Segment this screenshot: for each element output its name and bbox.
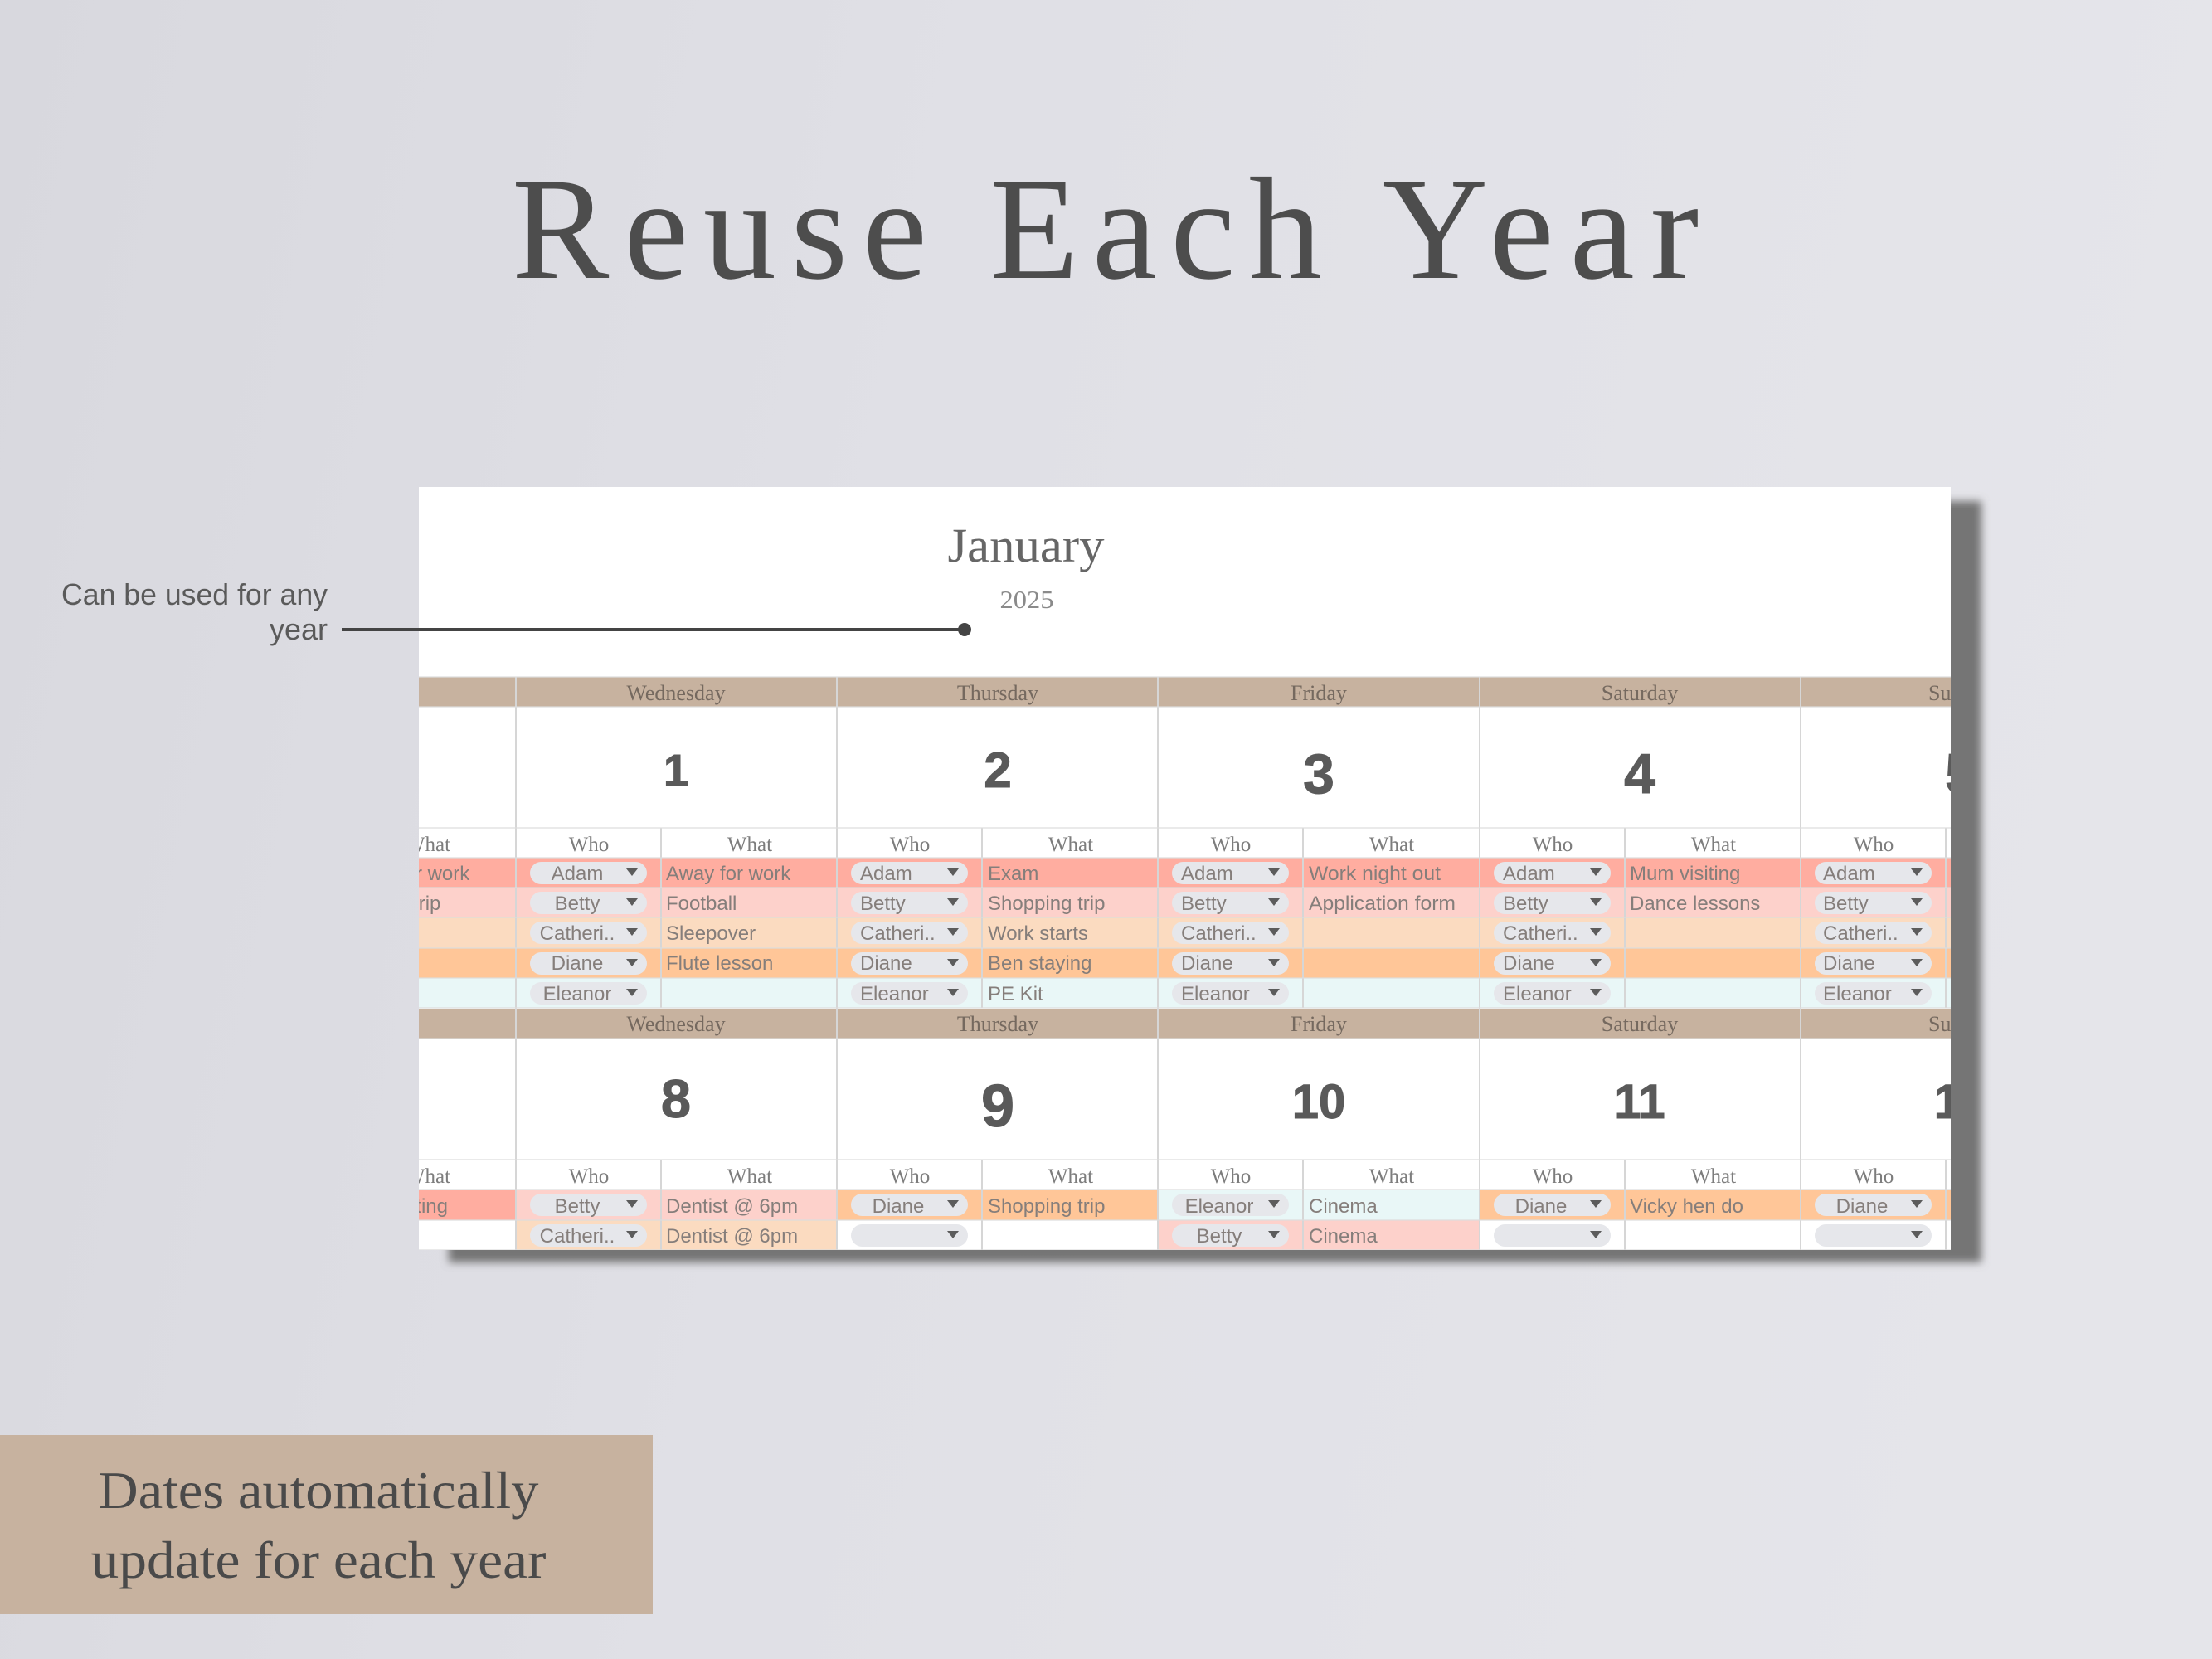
title: Each bbox=[989, 148, 1385, 310]
Saturday 4 entries: Eleanor bbox=[1503, 983, 1572, 1005]
Wednesday 1 entries: Diane bbox=[552, 952, 603, 975]
Saturday 4 entries: Adam bbox=[1503, 863, 1555, 885]
Sunday 5 entries: Betty bbox=[1823, 893, 1869, 915]
Saturday 11 entries: Diane bbox=[1515, 1195, 1567, 1218]
Saturday 4 entries: Catheri.. bbox=[1503, 922, 1578, 945]
week 2 date numbers: 10 bbox=[1292, 1075, 1345, 1129]
callout box: dates update bbox=[0, 1435, 653, 1614]
week 2 who and what labels: What bbox=[1691, 1165, 1736, 1188]
week 1 who and what labels: Who bbox=[1211, 834, 1251, 856]
Wednesday 1 entries: Flute lesson bbox=[666, 952, 773, 975]
month heading: January bbox=[947, 518, 1105, 572]
week 1 day header band: Saturday bbox=[1602, 681, 1678, 705]
week 1 who and what labels: What bbox=[406, 834, 450, 856]
Thursday 2 entries: Shopping trip bbox=[988, 893, 1105, 915]
week 2 day header band: Saturday bbox=[1602, 1012, 1678, 1036]
week 2 day header band: Sunday bbox=[1928, 1012, 1993, 1036]
month heading bbox=[949, 529, 1105, 609]
week 1 who and what labels: What bbox=[1048, 834, 1093, 856]
Wednesday 1 entries bbox=[530, 862, 791, 1005]
Sunday 5 entries: Eleanor bbox=[1823, 983, 1892, 1005]
Sunday 5 entries bbox=[1815, 862, 1932, 1005]
Saturday 4 entries: Mum visiting bbox=[1630, 863, 1740, 885]
panel: calendar spreadsheet bbox=[345, 487, 1993, 1250]
week 1 who and what labels: Who bbox=[1533, 834, 1573, 856]
Saturday 4 entries: Diane bbox=[1503, 952, 1555, 975]
Friday 3 entries: Adam bbox=[1181, 863, 1233, 885]
Thursday 2 entries bbox=[851, 862, 1105, 1005]
Friday 3 entries: Diane bbox=[1181, 952, 1233, 975]
callout box: dates update: Dates automatically bbox=[98, 1461, 539, 1520]
Friday 3 entries bbox=[1172, 862, 1456, 1005]
week 2 who and what labels: Who bbox=[1533, 1165, 1573, 1188]
Saturday 11 entries bbox=[1494, 1194, 1743, 1247]
left partial column entries bbox=[419, 866, 469, 1217]
Thursday 9 entries: Diane bbox=[873, 1195, 924, 1218]
week 1 coloured person rows bbox=[419, 858, 1951, 1008]
Friday 10 entries: Betty bbox=[1197, 1225, 1242, 1248]
week 1 date numbers: 5 bbox=[1945, 742, 1976, 805]
week 1 date numbers: 3 bbox=[1303, 742, 1334, 805]
week 1 day header band: Thursday bbox=[957, 681, 1038, 705]
week 1 who and what labels: What bbox=[1691, 834, 1736, 856]
Friday 10 entries bbox=[1172, 1194, 1378, 1248]
Saturday 4 entries: Betty bbox=[1503, 893, 1548, 915]
Thursday 2 entries: Adam bbox=[860, 863, 912, 885]
week 1 day header band bbox=[419, 677, 1993, 707]
panel shadow bbox=[449, 501, 1981, 1262]
Wednesday 1 entries: Football bbox=[666, 893, 737, 915]
callout: can be used for any year: year bbox=[270, 612, 328, 646]
week 1 who and what labels: Who bbox=[569, 834, 609, 856]
Saturday 4 entries: Dance lessons bbox=[1630, 893, 1760, 915]
week 2 date numbers: 9 bbox=[981, 1073, 1014, 1140]
week 1 who and what labels: Who bbox=[1854, 834, 1894, 856]
week 2 date numbers: 11 bbox=[1614, 1075, 1665, 1129]
Wednesday 1 entries: Eleanor bbox=[543, 983, 611, 1005]
Wednesday 1 entries: Away for work bbox=[666, 863, 791, 885]
week 2 who and what labels bbox=[419, 1168, 1893, 1183]
week 2 day header band: Wednesday bbox=[626, 1012, 726, 1036]
week 1 who and what labels: Who bbox=[890, 834, 930, 856]
week 1 who and what labels bbox=[419, 836, 1893, 851]
Thursday 9 entries bbox=[851, 1194, 1105, 1247]
Thursday 2 entries: Catheri.. bbox=[860, 922, 936, 945]
week 2 who and what labels: What bbox=[1048, 1165, 1093, 1188]
Wednesday 1 entries: Betty bbox=[555, 893, 600, 915]
Friday 3 entries: Work night out bbox=[1309, 863, 1441, 885]
Sunday 12 entries bbox=[1815, 1194, 1932, 1247]
week 2 day header band bbox=[419, 1009, 1993, 1039]
Wednesday 8 entries: Dentist @ 6pm bbox=[666, 1195, 798, 1218]
Wednesday 8 entries: Dentist @ 6pm bbox=[666, 1225, 798, 1248]
grid lines bbox=[419, 677, 1951, 1250]
Thursday 2 entries: Eleanor bbox=[860, 983, 929, 1005]
Saturday 11 entries: Vicky hen do bbox=[1630, 1195, 1743, 1218]
Wednesday 8 entries: Catheri.. bbox=[540, 1225, 615, 1248]
week 2 date numbers: 12 bbox=[1934, 1075, 1987, 1129]
title: Year bbox=[1383, 148, 1714, 310]
week 2 who and what labels: What bbox=[727, 1165, 772, 1188]
Wednesday 1 entries: Catheri.. bbox=[540, 922, 615, 945]
Thursday 2 entries: Betty bbox=[860, 893, 906, 915]
week 2 date numbers bbox=[662, 1079, 1951, 1127]
Friday 10 entries: Cinema bbox=[1309, 1195, 1378, 1218]
week 1 day header band: Wednesday bbox=[626, 681, 726, 705]
Sunday 5 entries: Diane bbox=[1823, 952, 1875, 975]
left partial column entries: Away for work bbox=[345, 863, 470, 885]
week 2 who and what labels: Who bbox=[1211, 1165, 1251, 1188]
week 2 who and what labels: What bbox=[1369, 1165, 1414, 1188]
Sunday 12 entries: Diane bbox=[1836, 1195, 1888, 1218]
arrow: callout leader line bbox=[342, 623, 971, 636]
month heading: 2025 bbox=[1000, 585, 1053, 614]
Wednesday 1 entries: Adam bbox=[552, 863, 603, 885]
Thursday 2 entries: Exam bbox=[988, 863, 1038, 885]
Thursday 9 entries: Shopping trip bbox=[988, 1195, 1105, 1218]
Wednesday 8 entries: Betty bbox=[555, 1195, 600, 1218]
Friday 10 entries: Eleanor bbox=[1185, 1195, 1253, 1218]
Friday 3 entries: Application form bbox=[1309, 893, 1456, 915]
week 2 who and what labels: Who bbox=[1854, 1165, 1894, 1188]
week 1 date numbers: 1 bbox=[664, 746, 688, 795]
week 2 date numbers: 8 bbox=[661, 1068, 691, 1129]
Thursday 2 entries: Diane bbox=[860, 952, 912, 975]
week 2 day header band: Friday bbox=[1291, 1012, 1347, 1036]
Wednesday 8 entries bbox=[530, 1194, 798, 1248]
week 1 who and what labels: What bbox=[727, 834, 772, 856]
left partial column entries: Meeting bbox=[377, 1195, 448, 1218]
week 2 day header band: Thursday bbox=[957, 1012, 1038, 1036]
Friday 10 entries: Cinema bbox=[1309, 1225, 1378, 1248]
week 1 date numbers: 4 bbox=[1624, 742, 1655, 805]
Sunday 5 entries: Adam bbox=[1823, 863, 1875, 885]
Saturday 4 entries bbox=[1494, 862, 1760, 1005]
Thursday 2 entries: Work starts bbox=[988, 922, 1088, 945]
week 1 who and what labels: What bbox=[1369, 834, 1414, 856]
left partial column entries: School trip bbox=[347, 893, 440, 915]
week 1 date numbers: 2 bbox=[984, 742, 1012, 798]
callout: can be used for any year: Can be used for any bbox=[61, 577, 328, 611]
Sunday 5 entries: Catheri.. bbox=[1823, 922, 1898, 945]
Thursday 2 entries: PE Kit bbox=[988, 983, 1043, 1005]
Wednesday 1 entries: Sleepover bbox=[666, 922, 756, 945]
week 2 who and what labels: Who bbox=[890, 1165, 930, 1188]
Friday 3 entries: Catheri.. bbox=[1181, 922, 1257, 945]
Friday 3 entries: Eleanor bbox=[1181, 983, 1250, 1005]
callout box: dates update: update for each year bbox=[91, 1530, 546, 1589]
week 1 day header band: Friday bbox=[1291, 681, 1347, 705]
week 1 date numbers bbox=[665, 752, 1951, 795]
week 1 day header band: Sunday bbox=[1928, 681, 1993, 705]
week 2 who and what labels: Who bbox=[569, 1165, 609, 1188]
week 2 coloured cells bbox=[419, 1190, 1951, 1250]
week 2 who and what labels: What bbox=[406, 1165, 450, 1188]
Thursday 2 entries: Ben staying bbox=[988, 952, 1091, 975]
title: Reuse bbox=[512, 148, 993, 310]
callout: can be used for any year bbox=[61, 577, 328, 646]
Friday 3 entries: Betty bbox=[1181, 893, 1227, 915]
